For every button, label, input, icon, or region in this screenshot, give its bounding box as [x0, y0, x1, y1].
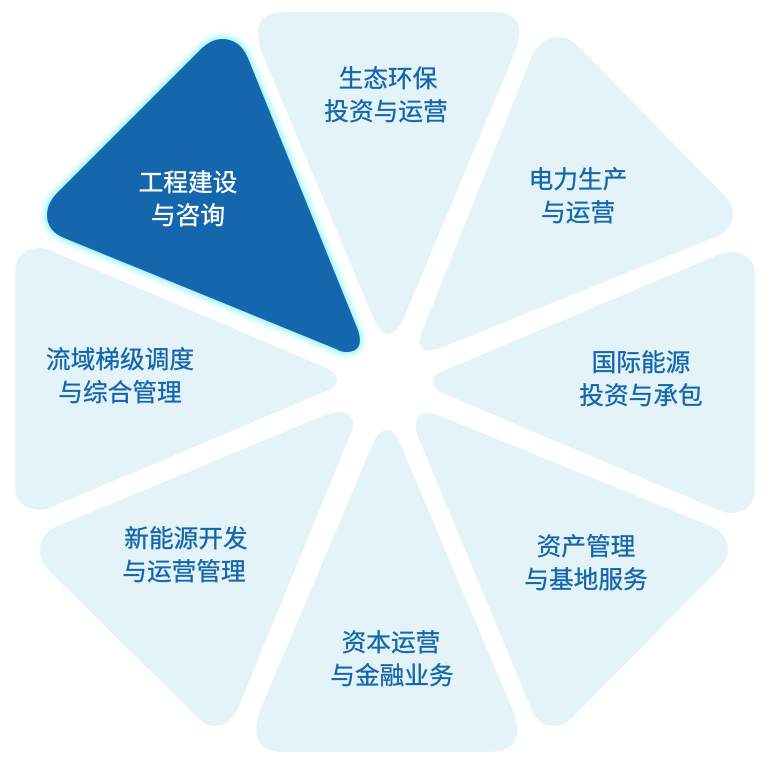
panel: engineering construction and consulting (highlighted): [47, 39, 360, 352]
panel: capital operation and financial business: 与金融业务: [330, 662, 454, 690]
panel: watershed cascade dispatch and integrated management: [15, 248, 337, 510]
panel: watershed cascade dispatch and integrated management: 与综合管理: [58, 379, 182, 407]
panel: power production and operation: 电力生产: [529, 166, 627, 194]
panel: capital operation and financial business: 资本运营: [342, 629, 440, 657]
panel: power production and operation: [419, 37, 733, 351]
panel: international energy investment and contracting: 国际能源: [592, 349, 690, 377]
panel: international energy investment and contracting: 投资与承包: [579, 382, 703, 410]
panel: capital operation and financial business: [256, 430, 517, 752]
panel: asset management and base services: 与基地服务: [524, 566, 648, 594]
panel: engineering construction and consulting (highlighted): 与咨询: [151, 202, 225, 230]
panel: asset management and base services: 资产管理: [537, 533, 635, 561]
panel: new energy development and operation management: 新能源开发: [124, 525, 248, 553]
panel: asset management and base services: [416, 413, 728, 726]
panel: international energy investment and contracting: [433, 252, 755, 513]
panel: engineering construction and consulting (highlighted): 工程建设: [139, 169, 237, 197]
panel: power production and operation: 与运营: [541, 199, 615, 227]
panel: new energy development and operation management: [40, 412, 353, 726]
panel: ecological environment investment and operation: [258, 12, 519, 334]
panel: watershed cascade dispatch and integrated management: 流域梯级调度: [46, 346, 194, 374]
panel: new energy development and operation management: 与运营管理: [122, 558, 246, 586]
panel: ecological environment investment and operation: 生态环保: [339, 65, 438, 93]
panel: ecological environment investment and operation: 投资与运营: [324, 98, 448, 126]
